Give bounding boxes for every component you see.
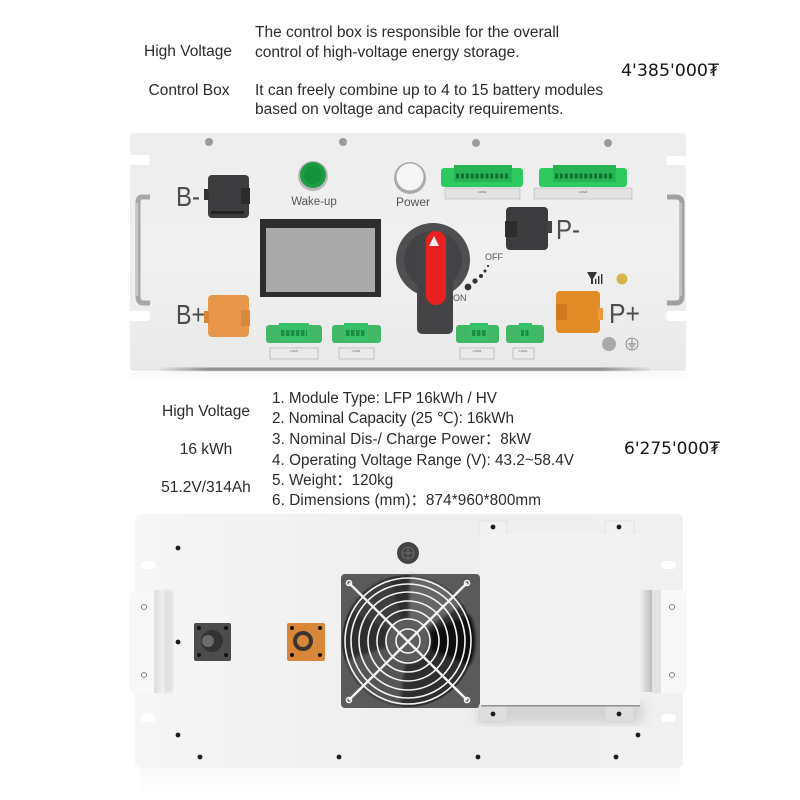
connector: rear positive bbox=[287, 623, 325, 661]
cable grommet bbox=[397, 542, 419, 564]
connector: B- black bbox=[204, 175, 250, 218]
brass screw bbox=[616, 274, 628, 284]
fan guard bbox=[345, 578, 471, 704]
terminal block: COM top right: COM3 bbox=[579, 190, 588, 194]
text block: control box description bbox=[255, 24, 603, 118]
terminal block: COM bottom 3 bbox=[456, 323, 499, 359]
text block: control box description: based on voltage and capacity requirements. bbox=[255, 101, 563, 118]
list: module specifications bbox=[272, 390, 575, 509]
label: B+: B+ bbox=[176, 299, 205, 330]
text block: control box description: It can freely combine up to 4 to 15 battery modules bbox=[255, 82, 603, 99]
shadow behind plate bbox=[478, 700, 643, 724]
display screen bbox=[260, 219, 381, 297]
text block: control box description: control of high-voltage energy storage. bbox=[255, 44, 520, 61]
switch scale: ON OFF bbox=[453, 252, 503, 303]
price: module: 6'275'000₮ bbox=[624, 439, 720, 459]
terminal block: COM top left bbox=[441, 165, 523, 199]
list: module specifications: 1. Module Type: LFP 16kWh / HV bbox=[272, 390, 498, 407]
rotary switch bbox=[396, 223, 470, 334]
heading: High Voltage Control Box: Control Box bbox=[149, 82, 230, 99]
switch scale: ON OFF: OFF bbox=[485, 252, 503, 262]
right bracket bbox=[640, 590, 687, 693]
list: module specifications: 6. Dimensions (mm)：874*960*800mm bbox=[272, 492, 541, 509]
cover plate bbox=[480, 534, 640, 706]
connector: P+ orange bbox=[556, 291, 603, 333]
heading: High Voltage Control Box bbox=[144, 43, 232, 99]
terminal block: COM bottom 2 bbox=[332, 323, 381, 359]
ground screw and symbol bbox=[602, 337, 638, 351]
plate tabs and screws bbox=[479, 521, 634, 722]
text block: control box description: The control box is responsible for the overall bbox=[255, 24, 559, 41]
heading: High Voltage 16 kWh bbox=[161, 403, 251, 496]
button: Wake-up: Wake-up bbox=[291, 196, 337, 208]
button: Wake-up bbox=[291, 161, 337, 208]
panel: battery module rear view bbox=[129, 514, 687, 794]
panel: control box front view bbox=[130, 133, 686, 382]
connector: rear negative bbox=[194, 623, 231, 661]
terminal block: COM top right bbox=[534, 165, 632, 199]
list: module specifications: 2. Nominal Capacity (25 ℃): 16kWh bbox=[272, 410, 514, 427]
list: module specifications: 3. Nominal Dis-/ Charge Power：8kW bbox=[272, 431, 532, 448]
left bracket bbox=[129, 590, 173, 693]
price: control box: 4'385'000₮ bbox=[621, 61, 719, 81]
heading: High Voltage 16 kWh: 16 kWh bbox=[180, 441, 232, 458]
icon: signal antenna bbox=[587, 272, 602, 284]
label: P-: P- bbox=[556, 214, 580, 245]
connector: B+ orange bbox=[204, 295, 250, 337]
list: module specifications: 4. Operating Voltage Range (V): 43.2~58.4V bbox=[272, 452, 575, 469]
heading: High Voltage 16 kWh: 51.2V/314Ah bbox=[161, 479, 251, 496]
fan bbox=[341, 574, 480, 708]
right handle bbox=[667, 197, 682, 303]
connector: P- black bbox=[505, 207, 552, 250]
left handle bbox=[137, 197, 150, 303]
terminal block: COM bottom 2: COM6 bbox=[352, 349, 361, 353]
terminal block: COM bottom 3: COM5 bbox=[473, 349, 482, 353]
terminal block: COM bottom 4: COM4 bbox=[519, 349, 528, 353]
slots bbox=[141, 561, 676, 722]
button: Power: Power bbox=[396, 195, 430, 209]
label: P+: P+ bbox=[609, 298, 640, 329]
heading: High Voltage Control Box: High Voltage bbox=[144, 43, 232, 60]
terminal block: COM bottom 1 bbox=[266, 323, 322, 359]
label: B-: B- bbox=[176, 181, 200, 212]
rear screws bbox=[176, 546, 640, 759]
heading: High Voltage 16 kWh: High Voltage bbox=[162, 403, 250, 420]
list: module specifications: 5. Weight：120kg bbox=[272, 472, 393, 489]
terminal block: COM bottom 1: COM7 bbox=[290, 349, 299, 353]
switch scale: ON OFF: ON bbox=[453, 293, 466, 303]
terminal block: COM bottom 4 bbox=[506, 323, 544, 359]
mounting screws bbox=[205, 138, 612, 147]
button: Power bbox=[394, 162, 430, 209]
terminal block: COM top left: COM2 bbox=[478, 190, 487, 194]
